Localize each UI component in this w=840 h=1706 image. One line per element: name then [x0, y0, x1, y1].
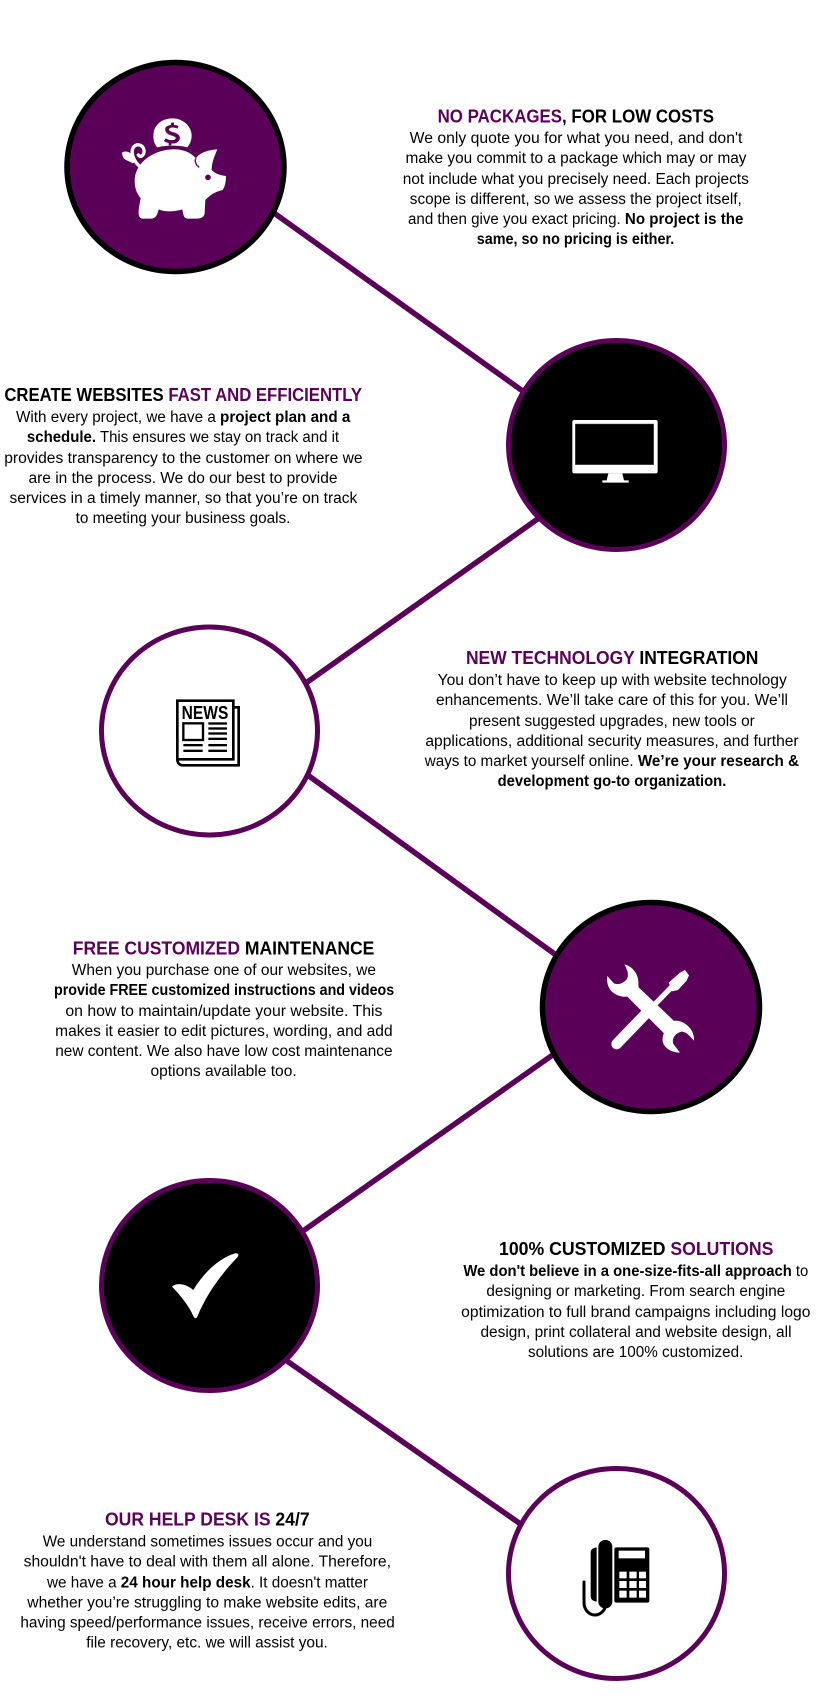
heading: OUR HELP DESK IS 24/7 — [105, 1508, 310, 1530]
body text — [424, 672, 799, 790]
body text: make you commit to a package which may or may — [406, 150, 747, 167]
icon: piggy bank — [122, 118, 226, 219]
text block: new technology — [424, 647, 799, 790]
body text: applications, additional security measures, and further — [425, 733, 799, 750]
icon: desk phone — [584, 1540, 649, 1615]
body text — [54, 962, 394, 1080]
body text: scope is different, so we assess the project itself, — [410, 191, 742, 208]
body text: You don’t have to keep up with website technology — [438, 672, 787, 689]
body text: shouldn't have to deal with them all alone. Therefore, — [24, 1554, 391, 1570]
circle: piggy bank — [67, 62, 284, 272]
heading: NEW TECHNOLOGY INTEGRATION — [466, 647, 758, 668]
body text: When you purchase one of our websites, we — [72, 962, 376, 979]
body text: We only quote you for what you need, and don't — [410, 130, 743, 147]
body text: enhancements. We’ll take care of this for you. We’ll — [436, 692, 788, 709]
body text: With every project, we have a project plan and a — [16, 409, 351, 426]
body text: ways to market yourself online. We’re your research & — [424, 753, 799, 770]
body text: new content. We also have low cost maintenance — [55, 1043, 393, 1060]
body text: not include what you precisely need. Each projects — [403, 171, 749, 188]
icon: newspaper: NEWS — [182, 702, 228, 723]
heading: 100% CUSTOMIZED SOLUTIONS — [499, 1238, 773, 1259]
body text: and then give you exact pricing. No project is the — [408, 211, 744, 228]
body text: optimization to full brand campaigns including logo — [461, 1304, 810, 1321]
body text: schedule. This ensures we stay on track and it — [27, 429, 340, 446]
body text: having speed/performance issues, receive errors, need — [20, 1614, 395, 1632]
text block: no packages — [403, 106, 749, 248]
connector lines — [274, 213, 556, 1525]
body text: on how to maintain/update your website. This — [65, 1003, 383, 1020]
body text: provides transparency to the customer on where we — [4, 450, 363, 467]
body text — [403, 130, 749, 248]
circle: newspaper — [102, 627, 318, 835]
heading: FREE CUSTOMIZED MAINTENANCE — [73, 938, 374, 958]
body text — [20, 1534, 395, 1652]
heading: NO PACKAGES, FOR LOW COSTS — [438, 106, 714, 126]
body text: designing or marketing. From search engine — [486, 1283, 785, 1300]
body text: makes it easier to edit pictures, wording, and add — [55, 1023, 393, 1040]
text block: help desk — [20, 1508, 395, 1652]
body text — [461, 1263, 810, 1361]
text block: create websites fast — [4, 384, 363, 527]
body text: present suggested upgrades, new tools or — [469, 713, 755, 730]
body text: options available too. — [150, 1063, 297, 1080]
body text: We don't believe in a one-size-fits-all approach to — [463, 1263, 808, 1280]
body text: solutions are 100% customized. — [528, 1344, 743, 1361]
body text: to meeting your business goals. — [76, 510, 290, 527]
circle: telephone — [508, 1468, 724, 1678]
body text: we have a 24 hour help desk. It doesn't matter — [46, 1574, 368, 1592]
icon: wrench and screwdriver — [607, 964, 694, 1053]
body text: We understand sometimes issues occur and you — [43, 1534, 372, 1550]
body text: services in a timely manner, so that you’re on track — [10, 490, 357, 507]
body text: development go-to organization. — [498, 773, 726, 790]
text block: free customized maintenance — [54, 938, 394, 1080]
body text: design, print collateral and website design, all — [480, 1324, 792, 1341]
body text: whether you’re struggling to make website edits, are — [26, 1594, 387, 1612]
body text — [4, 409, 363, 527]
icon: newspaper — [177, 701, 239, 765]
icon: monitor — [572, 420, 658, 483]
heading: CREATE WEBSITES FAST AND EFFICIENTLY — [4, 384, 363, 405]
circle: monitor — [508, 340, 724, 550]
circle: tools — [542, 902, 760, 1112]
body text: same, so no pricing is either. — [477, 231, 674, 248]
icon: check mark — [172, 1253, 238, 1318]
body text: file recovery, etc. we will assist you. — [86, 1634, 328, 1652]
body text: provide FREE customized instructions and videos — [54, 982, 394, 999]
text block: customized solutions — [461, 1238, 810, 1361]
circle: check mark — [102, 1180, 318, 1390]
body text: are in the process. We do our best to provide — [28, 470, 338, 487]
